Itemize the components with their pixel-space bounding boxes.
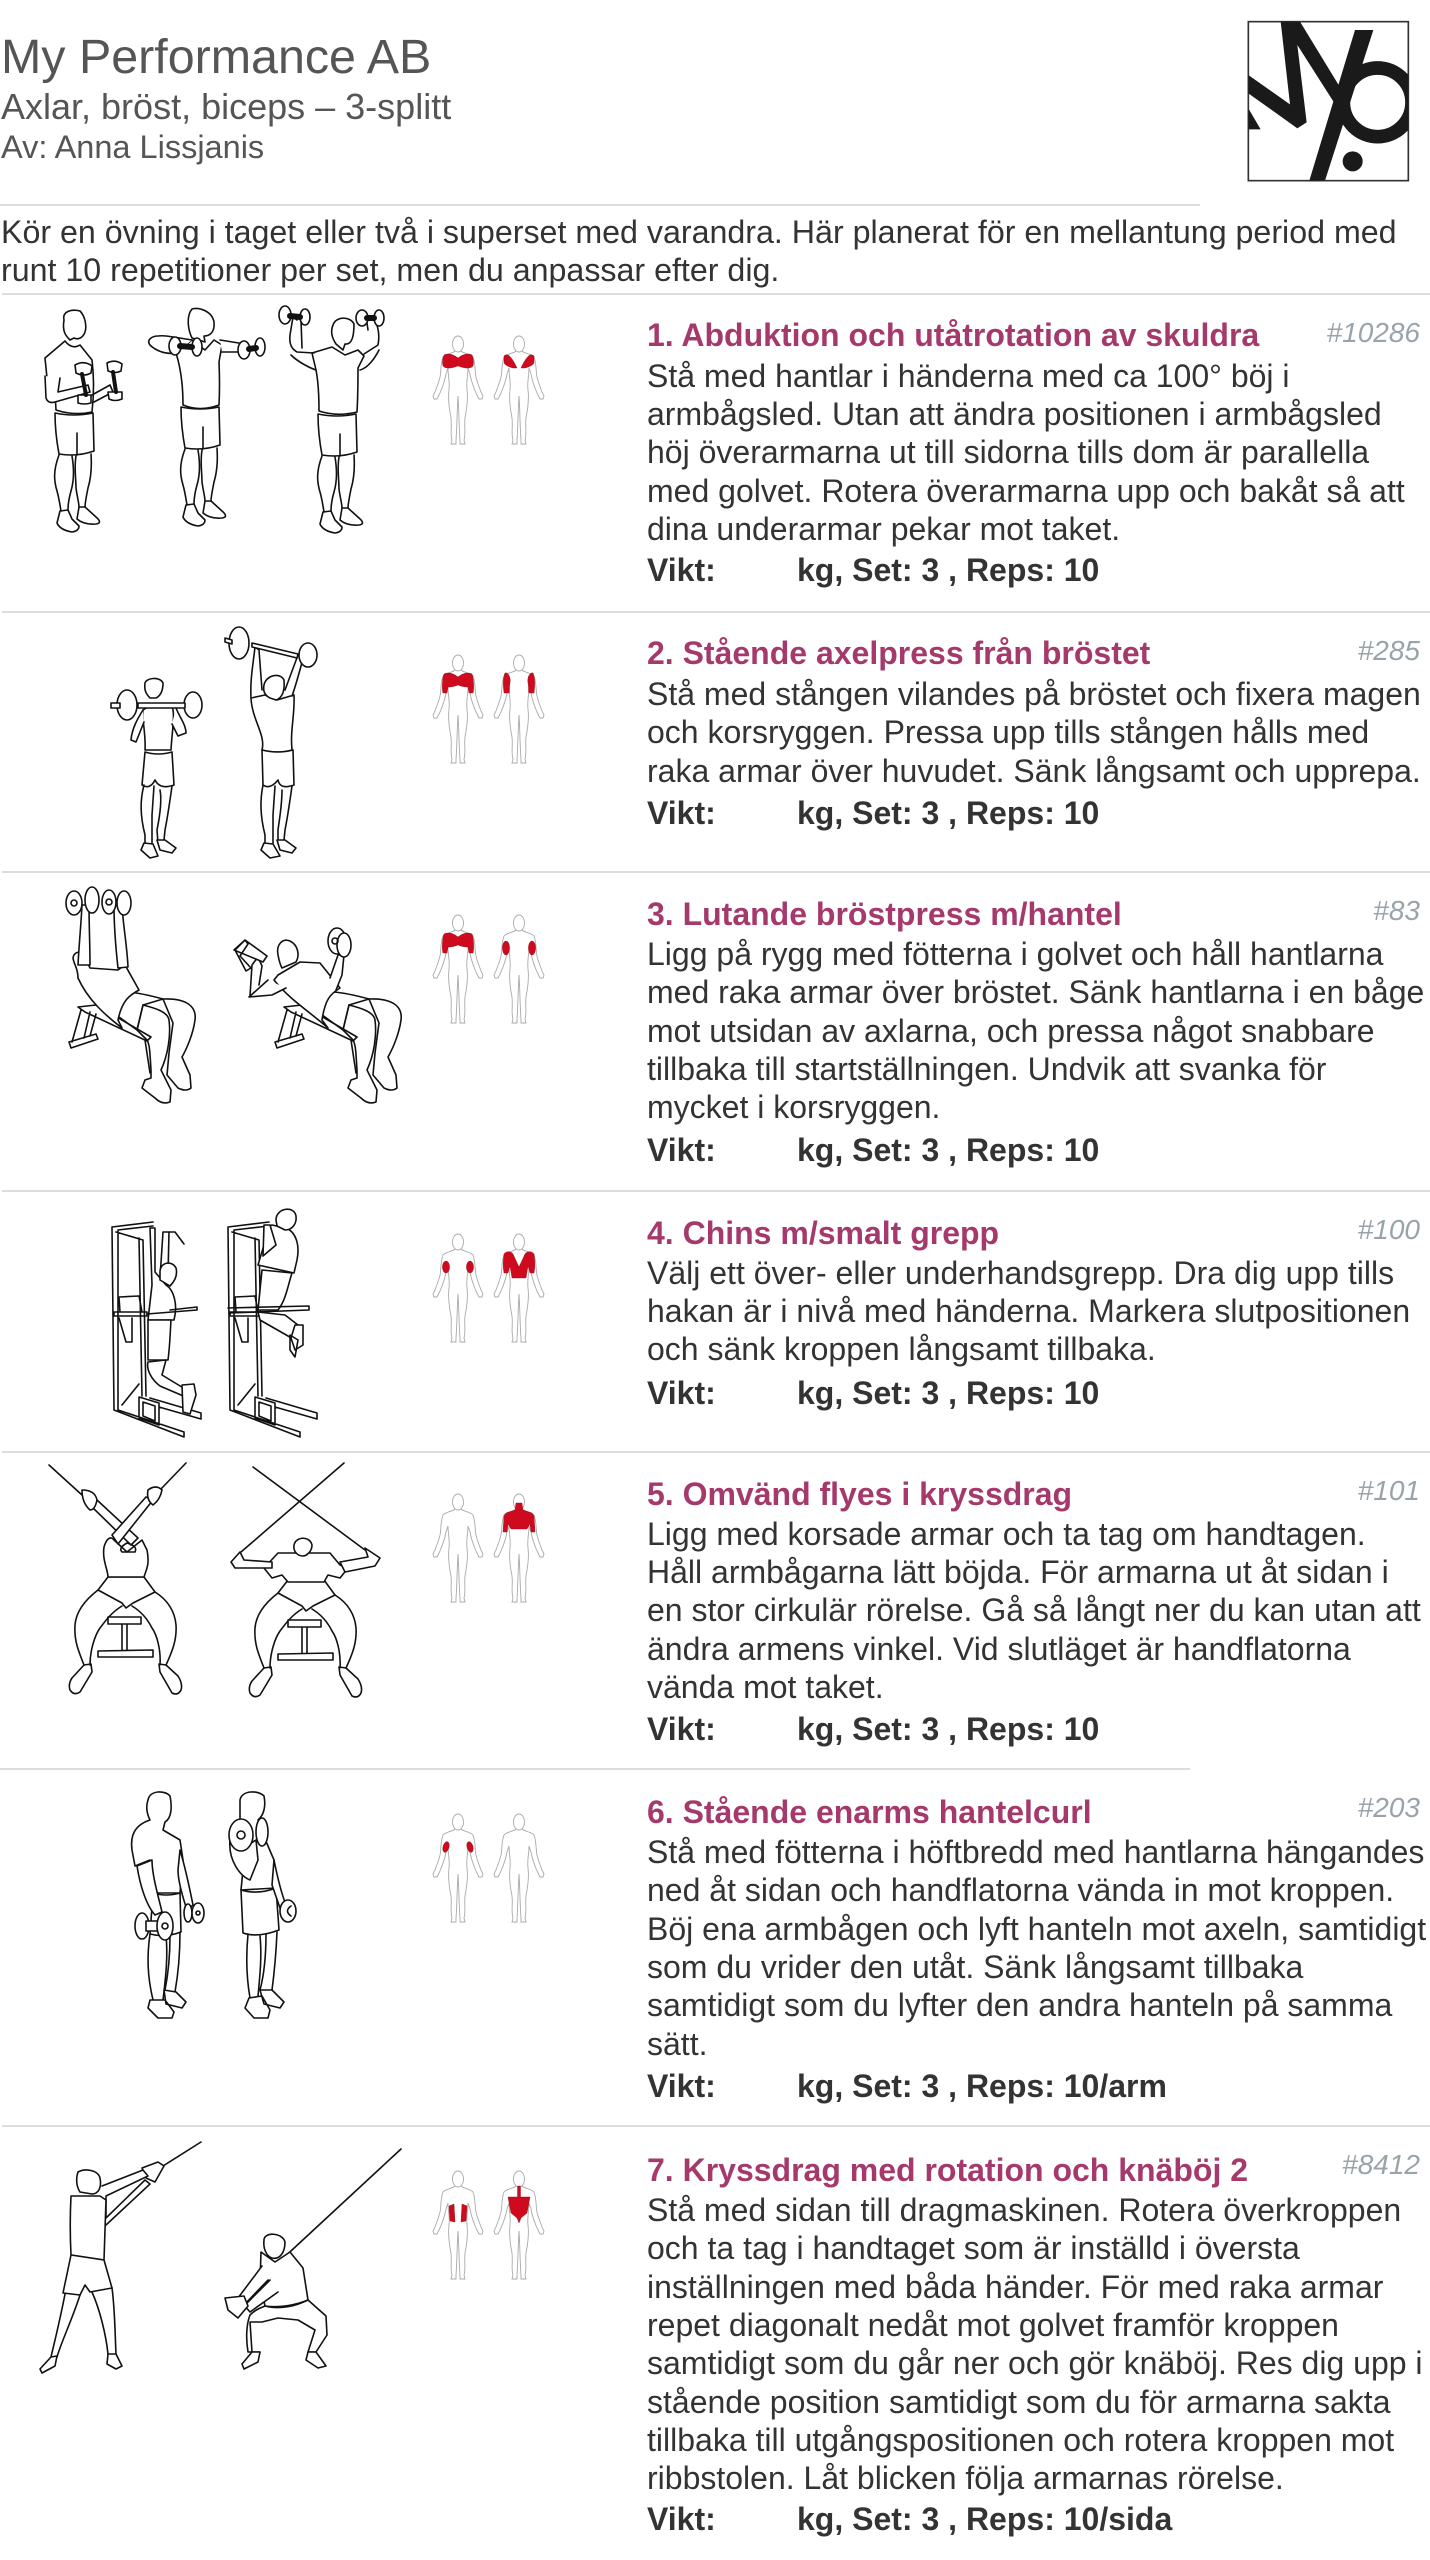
author: Av: Anna Lissjanis — [1, 129, 264, 165]
instructions: mot utsidan av axlarna, och pressa något snabbare — [647, 1013, 1375, 1049]
heading: 5. Omvänd flyes i kryssdrag — [647, 1476, 1072, 1512]
instructions: Stå med hantlar i händerna med ca 100° böj i — [647, 358, 1290, 394]
prescription: kg, Set: 3 , Reps: 10/arm — [797, 2068, 1167, 2104]
instructions: och ta tag i handtaget som är inställd i översta — [647, 2230, 1300, 2266]
instructions — [647, 936, 1424, 1125]
instructions: tillbaka till startställningen. Undvik att svanka för — [647, 1051, 1326, 1087]
exercise number: #100 — [1358, 1214, 1420, 1245]
instructions: repet diagonalt nedåt mot golvet framför kroppen — [647, 2307, 1339, 2343]
prescription — [647, 1711, 1099, 1747]
prescription: Vikt: — [647, 2068, 716, 2104]
instructions — [647, 1834, 1426, 2062]
instructions: stående position samtidigt som du för armarna sakta — [647, 2384, 1390, 2420]
illustration: dumbbell shoulder rotation, three positions — [44, 305, 385, 534]
panel: exercise 3 — [65, 886, 1424, 1168]
instructions: samtidigt som du lyfter den andra hanteln på samma — [647, 1987, 1392, 2023]
instructions: raka armar över huvudet. Sänk långsamt och upprepa. — [647, 753, 1421, 789]
instructions: mycket i korsryggen. — [647, 1089, 940, 1125]
heading: 6. Stående enarms hantelcurl — [647, 1794, 1092, 1830]
instructions: Böj ena armbågen och lyft hanteln mot axeln, samtidigt — [647, 1911, 1426, 1947]
instructions: som du vrider den utåt. Sänk långsamt tillbaka — [647, 1949, 1303, 1985]
muscle chart — [432, 914, 544, 1024]
exercise number: #203 — [1358, 1792, 1420, 1823]
illustration: cable rotation with squat — [39, 2141, 402, 2374]
prescription: Vikt: — [647, 552, 716, 588]
intro text: runt 10 repetitioner per set, men du anpassar efter dig. — [1, 252, 779, 288]
instructions: Stå med stången vilandes på bröstet och fixera magen — [647, 676, 1421, 712]
exercise number: #83 — [1373, 895, 1420, 926]
subtitle: Axlar, bröst, biceps – 3-splitt — [1, 86, 451, 126]
instructions — [647, 2192, 1423, 2496]
panel: exercise 4 — [111, 1208, 1420, 1438]
instructions — [647, 1516, 1421, 1705]
instructions: höj överarmarna ut till sidorna tills dom är parallella — [647, 434, 1369, 470]
prescription: kg, Set: 3 , Reps: 10 — [797, 1375, 1099, 1411]
instructions — [647, 358, 1405, 547]
muscle chart — [432, 336, 544, 444]
prescription: kg, Set: 3 , Reps: 10 — [797, 1132, 1099, 1168]
illustration: narrow-grip chins — [111, 1208, 318, 1438]
logo — [1248, 20, 1410, 182]
instructions: och sänk kroppen långsamt tillbaka. — [647, 1331, 1156, 1367]
instructions: ned åt sidan och handflatorna vända in mot kroppen. — [647, 1872, 1394, 1908]
muscle chart — [432, 1234, 544, 1342]
prescription — [647, 1375, 1099, 1411]
exercise number: #10286 — [1327, 317, 1420, 348]
illustration: reverse cable flyes — [48, 1462, 381, 1698]
panel: exercise 2 — [110, 626, 1421, 859]
instructions: Välj ett över- eller underhandsgrepp. Dra dig upp tills — [647, 1254, 1394, 1290]
instructions: med raka armar över bröstet. Sänk hantlarna i en båge — [647, 974, 1424, 1010]
prescription: Vikt: — [647, 1375, 716, 1411]
prescription: Vikt: — [647, 795, 716, 831]
heading: 2. Stående axelpress från bröstet — [647, 635, 1150, 671]
instructions: Stå med fötterna i höftbredd med hantlarna hängandes — [647, 1834, 1424, 1870]
instructions: Ligg med korsade armar och ta tag om handtagen. — [647, 1516, 1366, 1552]
instructions: sätt. — [647, 2026, 707, 2062]
prescription: Vikt: — [647, 1711, 716, 1747]
exercise number: #8412 — [1342, 2149, 1420, 2180]
prescription: kg, Set: 3 , Reps: 10 — [797, 552, 1099, 588]
prescription — [647, 552, 1099, 588]
intro text — [1, 214, 1397, 288]
instructions: Stå med sidan till dragmaskinen. Rotera överkroppen — [647, 2192, 1401, 2228]
prescription: kg, Set: 3 , Reps: 10 — [797, 795, 1099, 831]
illustration: standing barbell press — [110, 626, 318, 859]
heading: 1. Abduktion och utåtrotation av skuldra — [647, 317, 1259, 353]
heading: 7. Kryssdrag med rotation och knäböj 2 — [647, 2152, 1248, 2188]
instructions — [647, 1254, 1410, 1367]
muscle chart — [432, 1814, 544, 1922]
instructions: Håll armbågarna lätt böjda. För armarna ut åt sidan i — [647, 1554, 1389, 1590]
prescription — [647, 795, 1099, 831]
panel: exercise 7 — [39, 2141, 1423, 2537]
instructions: samtidigt som du går ner och gör knäböj. Res dig upp i — [647, 2345, 1423, 2381]
instructions: vända mot taket. — [647, 1669, 884, 1705]
panel: exercise 5 — [48, 1462, 1421, 1747]
prescription: kg, Set: 3 , Reps: 10 — [797, 1711, 1099, 1747]
instructions: Ligg på rygg med fötterna i golvet och håll hantlarna — [647, 936, 1383, 972]
instructions: inställningen med båda händer. För med raka armar — [647, 2269, 1383, 2305]
prescription: kg, Set: 3 , Reps: 10/sida — [797, 2501, 1172, 2537]
instructions: en stor cirkulär rörelse. Gå så långt ner du kan utan att — [647, 1592, 1421, 1628]
instructions: tillbaka till utgångspositionen och rotera kroppen mot — [647, 2422, 1394, 2458]
instructions: ändra armens vinkel. Vid slutläget är handflatorna — [647, 1631, 1351, 1667]
instructions: och korsryggen. Pressa upp tills stången hålls med — [647, 714, 1369, 750]
instructions: hakan är i nivå med händerna. Markera slutpositionen — [647, 1293, 1410, 1329]
panel: exercise 6 — [130, 1791, 1426, 2104]
instructions: med golvet. Rotera överarmarna upp och bakåt så att — [647, 473, 1405, 509]
title: My Performance AB — [1, 30, 431, 84]
intro text: Kör en övning i taget eller två i superset med varandra. Här planerat för en mellantung period med — [1, 214, 1397, 250]
instructions: dina underarmar pekar mot taket. — [647, 511, 1120, 547]
muscle chart — [432, 1494, 544, 1602]
panel: exercise 1 — [44, 305, 1420, 588]
muscle chart — [432, 2170, 544, 2280]
muscle chart — [432, 654, 544, 764]
heading: 3. Lutande bröstpress m/hantel — [647, 896, 1122, 932]
illustration: incline dumbbell press — [65, 886, 402, 1104]
heading: 4. Chins m/smalt grepp — [647, 1214, 999, 1250]
instructions: armbågsled. Utan att ändra positionen i armbågsled — [647, 396, 1382, 432]
illustration: standing one-arm curl — [130, 1791, 297, 2019]
exercise number: #101 — [1358, 1475, 1420, 1506]
prescription — [647, 1132, 1099, 1168]
prescription: Vikt: — [647, 1132, 716, 1168]
prescription: Vikt: — [647, 2501, 716, 2537]
instructions — [647, 676, 1421, 789]
instructions: ribbstolen. Låt blicken följa armarnas rörelse. — [647, 2460, 1284, 2496]
exercise number: #285 — [1358, 635, 1420, 666]
